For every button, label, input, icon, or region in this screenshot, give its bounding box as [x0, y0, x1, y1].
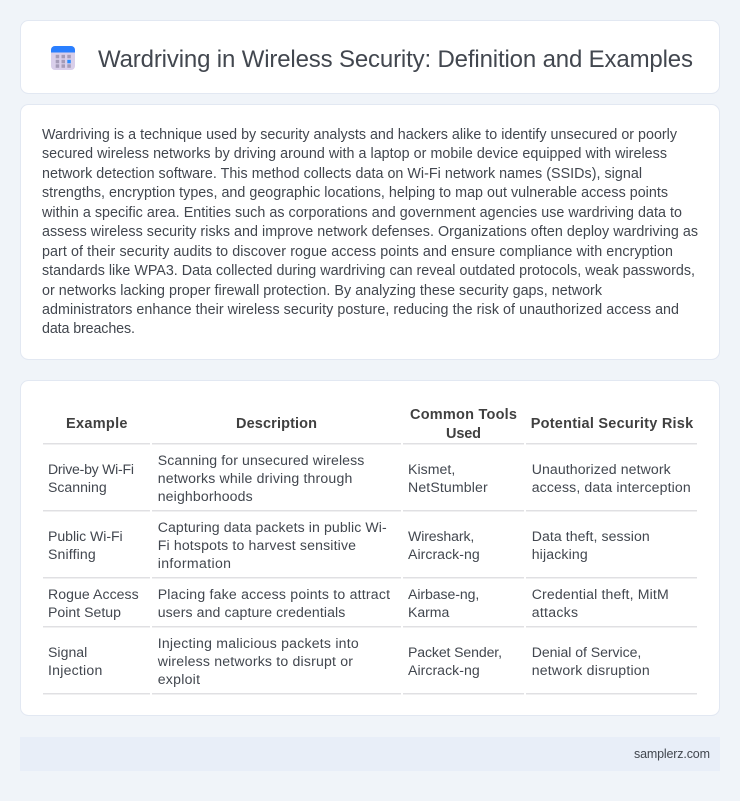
paragraph text: standards like WPA3. Data collected during wardriving can reveal outdated protocols, weak passwords, — [42, 263, 695, 279]
row: Signal Injection: Denial of Service, — [532, 644, 641, 660]
paragraph text: Wardriving is a technique used by security analysts and hackers alike to identify unsecured or poorly — [42, 127, 678, 143]
row: Signal Injection: wireless networks to disrupt or — [157, 653, 353, 669]
table header: Potential Security Risk — [531, 416, 694, 432]
row: Signal Injection: network disruption — [532, 662, 650, 678]
row: Drive-by Wi-Fi Scanning: Scanning — [48, 479, 107, 495]
row: Signal Injection: Aircrack-ng — [408, 662, 480, 678]
row: Signal Injection: Packet Sender, — [408, 644, 502, 660]
footer — [20, 737, 720, 771]
row: Public Wi-Fi Sniffing: Capturing data packets in public Wi- — [158, 519, 387, 535]
row: Public Wi-Fi Sniffing: information — [158, 555, 231, 571]
panel: examples table — [20, 380, 720, 716]
table header — [43, 407, 697, 444]
row: Signal Injection: Injection — [48, 662, 102, 678]
icon: calendar — [51, 46, 75, 70]
row: Drive-by Wi-Fi Scanning: Scanning for unsecured wireless — [158, 452, 364, 468]
row: Drive-by Wi-Fi Scanning: Unauthorized network — [532, 461, 672, 477]
paragraph text — [41, 127, 698, 337]
row: Rogue Access Point Setup: users and capture credentials — [158, 604, 345, 620]
paragraph text: network detection software. This method collects data on Wi-Fi network names (SSIDs), signal — [42, 166, 642, 182]
row: Drive-by Wi-Fi Scanning: Kismet, — [408, 461, 455, 477]
table header: Example — [66, 416, 128, 432]
table header: Description — [236, 416, 317, 432]
row: Signal Injection — [43, 635, 697, 694]
row: Public Wi-Fi Sniffing: hijacking — [532, 546, 588, 562]
paragraph text: assess wireless security risks and improve network defenses. Organizations often deploy wardriving as — [42, 224, 698, 240]
row: Public Wi-Fi Sniffing: Data theft, session — [532, 528, 650, 544]
row: Rogue Access Point Setup: Airbase-ng, — [408, 586, 479, 602]
row: Signal Injection: Signal — [48, 644, 87, 660]
paragraph text: strengths, encryption types, and geographic locations, helping to map out vulnerable access points — [42, 185, 668, 201]
row: Rogue Access Point Setup: Karma — [408, 604, 449, 620]
row: Drive-by Wi-Fi Scanning: access, data interception — [532, 479, 691, 495]
row: Rogue Access Point Setup — [43, 586, 697, 628]
table header: Used — [446, 426, 481, 442]
paragraph text: part of their security audits to discover rogue access points and ensure compliance with encryption — [42, 244, 673, 260]
row: Signal Injection: Injecting malicious packets into — [158, 635, 359, 651]
row: Public Wi-Fi Sniffing: Public Wi-Fi — [48, 528, 123, 544]
row: Public Wi-Fi Sniffing: Aircrack-ng — [408, 546, 480, 562]
paragraph text: administrators enhance their wireless security posture, reducing the risk of unauthorized access and — [42, 302, 679, 318]
paragraph text: or networks lacking proper firewall protection. By analyzing these security gaps, network — [42, 283, 603, 299]
paragraph text: secured wireless networks by driving around with a laptop or mobile device equipped with wireless — [42, 146, 667, 162]
row: Drive-by Wi-Fi Scanning: Drive-by Wi-Fi — [48, 461, 134, 477]
footer credit: samplerz.com — [634, 747, 710, 761]
row: Signal Injection: exploit — [158, 671, 200, 687]
row: Public Wi-Fi Sniffing — [43, 519, 697, 578]
row: Public Wi-Fi Sniffing: Sniffing — [48, 546, 96, 562]
row: Drive-by Wi-Fi Scanning: neighborhoods — [158, 488, 253, 504]
row: Rogue Access Point Setup: attacks — [532, 604, 578, 620]
row: Rogue Access Point Setup: Point Setup — [48, 604, 121, 620]
row: Rogue Access Point Setup: Credential theft, MitM — [532, 586, 669, 602]
title card — [20, 20, 720, 94]
paragraph text: within a specific area. Entities such as corporations and government agencies use wardriving data to — [41, 205, 682, 221]
row: Public Wi-Fi Sniffing: Fi hotspots to harvest sensitive — [158, 537, 356, 553]
row: Rogue Access Point Setup: Rogue Access — [48, 586, 139, 602]
paragraph text: data breaches. — [42, 321, 135, 337]
row: Drive-by Wi-Fi Scanning: networks while driving through — [158, 470, 352, 486]
title: Wardriving in Wireless Security: Definition and Examples — [98, 46, 693, 73]
table header: Common Tools — [410, 407, 517, 423]
row: Rogue Access Point Setup: Placing fake access points to attract — [158, 586, 390, 602]
row: Drive-by Wi-Fi Scanning: NetStumbler — [408, 479, 488, 495]
row: Drive-by Wi-Fi Scanning — [43, 452, 697, 512]
panel: definition paragraph — [20, 104, 720, 360]
row: Public Wi-Fi Sniffing: Wireshark, — [408, 528, 474, 544]
